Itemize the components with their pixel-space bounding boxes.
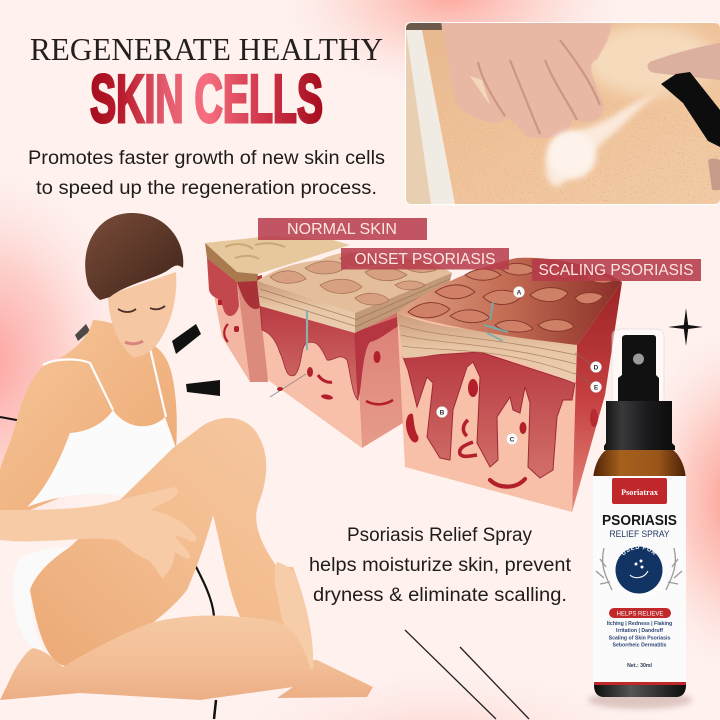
- label: onset psoriasis: ONSET PSORIASIS: [354, 251, 496, 268]
- helps relieve pill: [609, 608, 671, 618]
- skin diagram: scaling psoriasis: D: [594, 364, 599, 372]
- benefit text: dryness & eliminate scalling.: [313, 585, 567, 606]
- symptom list: Scaling of Skin Psoriasis: [609, 636, 670, 642]
- benefit text: helps moisturize skin, prevent: [309, 555, 572, 576]
- red stripe: [594, 682, 686, 685]
- head and hair: [85, 213, 183, 357]
- used for badge: DRY & ITCHY SKIN: [617, 586, 661, 600]
- hip, raised thigh and shin: [20, 418, 313, 667]
- symptom list: [607, 621, 672, 648]
- net volume: Net.: 30ml: [627, 663, 652, 669]
- skin diagram: onset psoriasis: [257, 252, 452, 448]
- white label: [593, 476, 686, 685]
- label: normal skin: [258, 218, 427, 240]
- label: scaling psoriasis: SCALING PSORIASIS: [538, 262, 694, 279]
- skin diagram: normal skin: [205, 236, 350, 382]
- label: onset psoriasis: [341, 248, 509, 270]
- woman in white top: [0, 213, 373, 700]
- intro text: Promotes faster growth of new skin cells: [28, 147, 385, 169]
- skin diagram: scaling psoriasis: C: [510, 436, 515, 444]
- skin diagram: scaling psoriasis: A: [517, 290, 522, 296]
- title: skin cells: SKIN CELLS: [90, 61, 323, 137]
- white briefs: [13, 547, 70, 650]
- photo: spray applied on itchy skin: [405, 22, 720, 205]
- nozzle: [618, 335, 659, 402]
- benefit text: Psoriasis Relief Spray: [347, 525, 532, 546]
- symptom list: Seborrheic Dermatitis: [613, 642, 667, 648]
- used for badge: USED FOR: [622, 546, 656, 556]
- black collar: [604, 401, 675, 450]
- neck, chest and left arm: [0, 320, 177, 515]
- symptom list: Irritation | Dandruff: [616, 628, 663, 634]
- product subtitle: RELIEF SPRAY: [610, 529, 670, 540]
- forearm and hand: [0, 487, 197, 578]
- product bottle: [587, 328, 693, 712]
- product name: PSORIASIS: [602, 513, 677, 529]
- skin diagram: scaling psoriasis: B: [440, 410, 445, 416]
- benefit text: [309, 525, 572, 606]
- clear cap: [612, 329, 664, 402]
- hand on shin: [275, 562, 314, 670]
- lower leg on floor: [0, 615, 373, 700]
- used for badge: [616, 546, 662, 594]
- tank top straps: [43, 344, 166, 417]
- title: regenerate healthy: REGENERATE HEALTHY: [30, 31, 383, 67]
- intro text: to speed up the regeneration process.: [36, 177, 377, 199]
- label: normal skin: NORMAL SKIN: [287, 221, 397, 238]
- bottle base: [594, 685, 686, 697]
- symptom list: Itching | Redness | Flaking: [607, 621, 672, 627]
- label brand tag: Psoriatrax: [621, 488, 659, 497]
- intro text: [28, 147, 385, 199]
- decorative black strokes and sparkle: [0, 308, 703, 719]
- amber shoulder: [593, 450, 686, 482]
- white tank top: [27, 410, 176, 507]
- skin diagram: scaling psoriasis: E: [594, 384, 599, 392]
- label brand tag: [612, 478, 667, 504]
- helps relieve pill: HELPS RELIEVE: [617, 612, 663, 618]
- skin diagram: scaling psoriasis: [397, 258, 622, 512]
- leaves: [596, 548, 682, 590]
